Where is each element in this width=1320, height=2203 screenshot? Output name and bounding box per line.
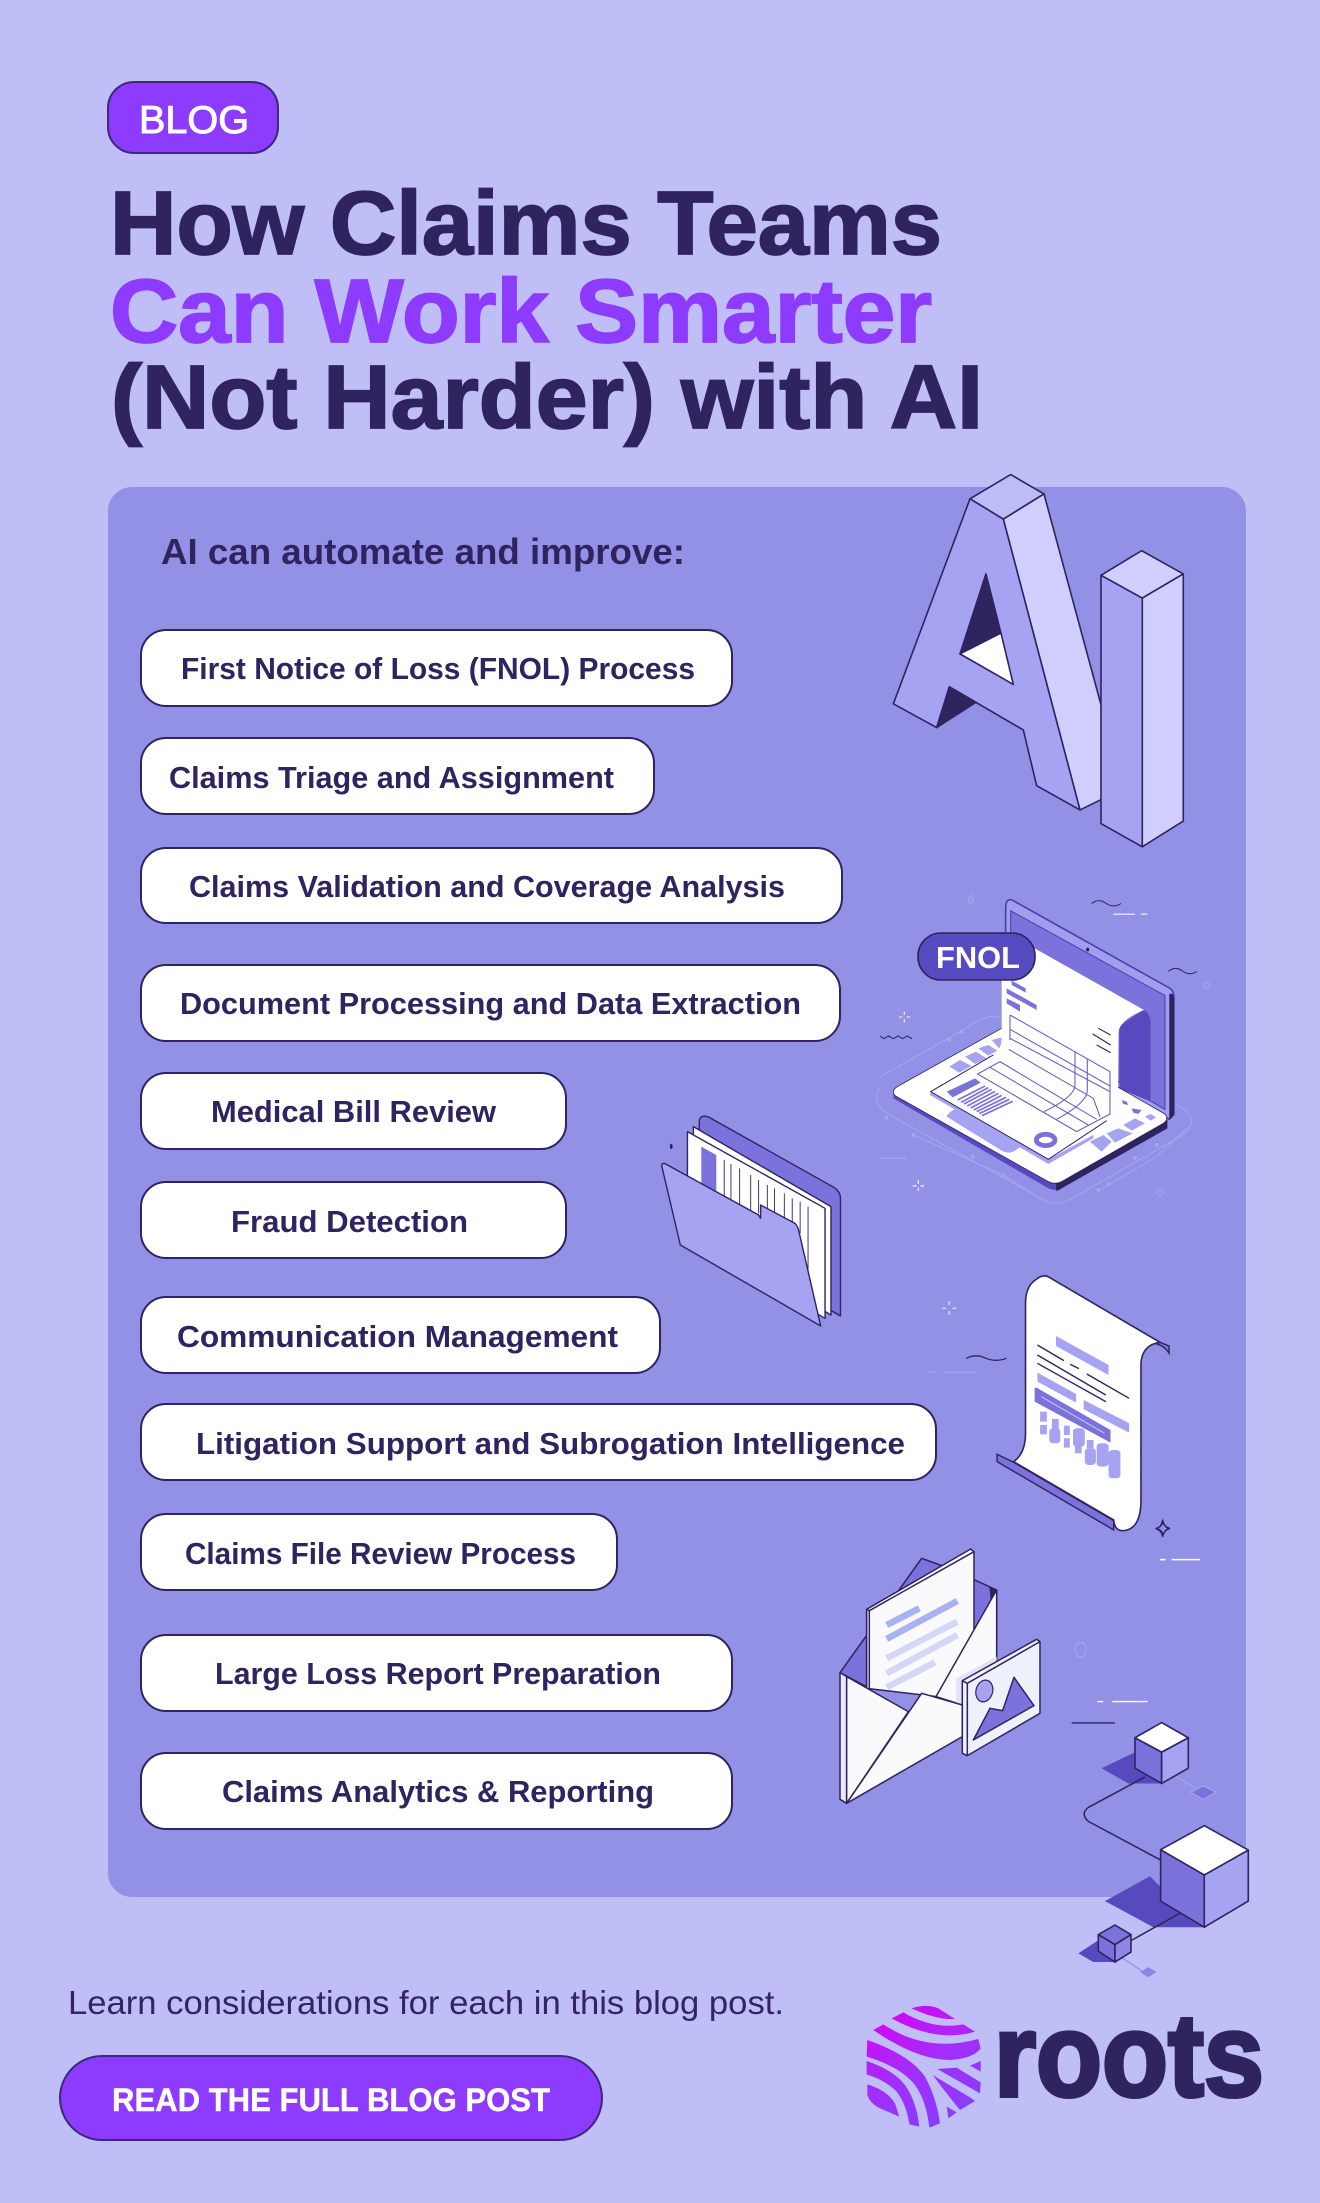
pill: validation <box>141 848 842 923</box>
pill: litigation <box>141 1404 936 1480</box>
label: FNOL tag <box>918 933 1035 980</box>
pill: large loss <box>141 1635 732 1711</box>
pill: litigation: Litigation Support and Subrogation Intelligence <box>196 1426 905 1461</box>
button: read the full blog post <box>60 2056 602 2140</box>
pill: analytics: Claims Analytics & Reporting <box>222 1774 654 1809</box>
pill: document processing <box>141 965 840 1041</box>
title: (Not Harder) with AI <box>111 348 983 448</box>
title: How Claims Teams <box>110 174 942 274</box>
title: Can Work Smarter <box>110 262 932 362</box>
button: read the full blog post: READ THE FULL BLOG POST <box>112 2082 550 2118</box>
logo: roots <box>867 1990 1264 2128</box>
pill: communication: Communication Management <box>177 1319 618 1354</box>
title <box>110 174 983 448</box>
pill: triage <box>141 738 654 814</box>
pill: communication <box>141 1297 660 1373</box>
pill: validation: Claims Validation and Coverage Analysis <box>189 869 785 904</box>
label: FNOL tag: FNOL <box>936 940 1020 975</box>
pill: fraud <box>141 1182 566 1258</box>
pill: document processing: Document Processing and Data Extraction <box>180 986 801 1021</box>
pill: fraud: Fraud Detection <box>231 1204 468 1239</box>
pill: medical bill: Medical Bill Review <box>211 1094 497 1129</box>
list of capability pills <box>141 630 936 1829</box>
panel: automation list <box>108 487 1246 1897</box>
icon: connected cubes <box>1072 1520 1248 1977</box>
icon: folder with documents <box>662 1116 840 1326</box>
pill: file review: Claims File Review Process <box>185 1536 576 1571</box>
panel heading: AI can automate and improve: <box>161 531 685 572</box>
icon: open envelope with letter and picture <box>840 1549 1040 1803</box>
icon: scroll document <box>913 1180 1170 1535</box>
pill: FNOL: First Notice of Loss (FNOL) Process <box>181 651 695 686</box>
footer text: Learn considerations for each in this blog post. <box>68 1984 784 2021</box>
pill: large loss: Large Loss Report Preparation <box>215 1656 661 1691</box>
badge: BLOG: BLOG <box>139 99 249 142</box>
pill: triage: Claims Triage and Assignment <box>169 760 614 795</box>
badge: BLOG <box>108 82 278 153</box>
icon: isometric AI letters <box>893 475 1183 847</box>
pill: medical bill <box>141 1073 566 1149</box>
pill: analytics <box>141 1753 732 1829</box>
pill: FNOL <box>141 630 732 706</box>
logo mark <box>867 2006 981 2128</box>
icon: laptop with FNOL document <box>876 895 1210 1203</box>
logo wordmark: roots <box>994 1990 1264 2122</box>
pill: file review <box>141 1514 617 1590</box>
